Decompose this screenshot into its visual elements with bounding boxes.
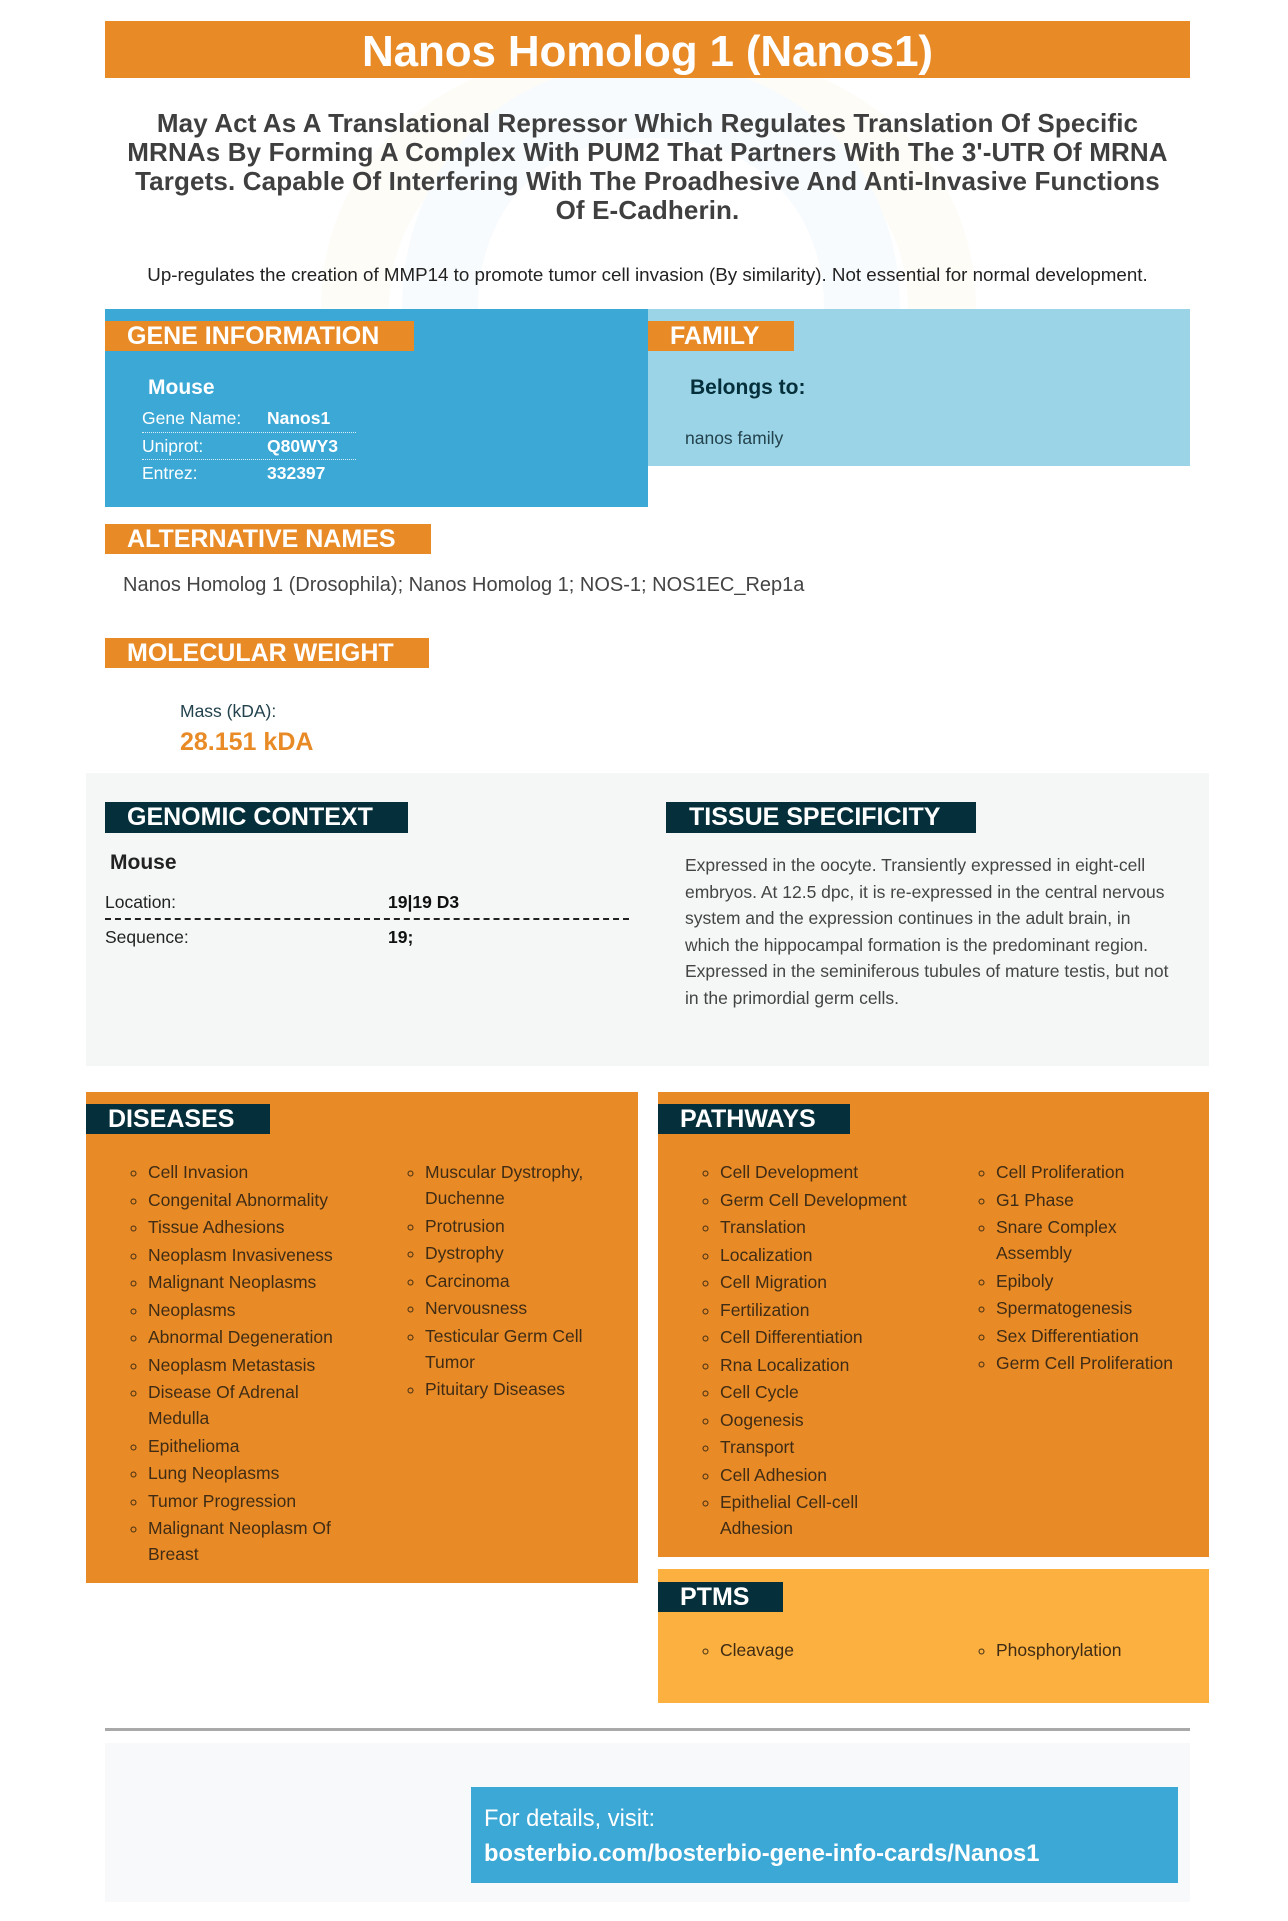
- pathways list column 1: Adhesion: [720, 1518, 793, 1538]
- diseases list column 1: Tumor Progression: [148, 1490, 296, 1510]
- footer panel: [105, 1743, 1190, 1902]
- subtitle: May Act As A Translational Repressor Which Regulates Translation Of Specific: [157, 108, 1138, 138]
- panel: gene information: [105, 309, 648, 507]
- pathways list column 1: Transport: [720, 1437, 794, 1457]
- heading: pathways: [658, 1104, 850, 1134]
- diseases list column 2: Duchenne: [425, 1188, 505, 1208]
- diseases list column 1: Lung Neoplasms: [148, 1463, 279, 1483]
- pathways list column 2: Germ Cell Proliferation: [996, 1353, 1173, 1373]
- gene details table: Gene Name:: [142, 408, 241, 428]
- heading: molecular weight: MOLECULAR WEIGHT: [127, 639, 394, 667]
- description: Up-regulates the creation of MMP14 to promote tumor cell invasion (By similarity). Not essential for normal development.: [147, 264, 1148, 285]
- diseases list column 2: Testicular Germ Cell: [425, 1326, 583, 1346]
- diseases list column 2: Nervousness: [425, 1298, 527, 1318]
- call to action: [471, 1787, 1178, 1883]
- diseases list column 2: Pituitary Diseases: [425, 1379, 565, 1399]
- molecular weight value: 28.151 kDA: [180, 728, 313, 756]
- details link: bosterbio.com/bosterbio-gene-info-cards/Nanos1: [484, 1841, 1039, 1867]
- pathways list column 1: Cell Differentiation: [720, 1327, 863, 1347]
- tissue specificity text: system and the expression continues in the adult brain, in: [685, 908, 1131, 928]
- diseases list column 1: Breast: [148, 1544, 199, 1564]
- belongs to label: Belongs to:: [690, 376, 806, 399]
- pathways list column 1: Cell Adhesion: [720, 1464, 827, 1484]
- watermark logo: [0, 0, 1288, 320]
- diseases list column 1: Abnormal Degeneration: [148, 1327, 333, 1347]
- species: Mouse: [110, 851, 177, 874]
- subtitle: Of E-Cadherin.: [556, 195, 739, 225]
- diseases list column 1: Neoplasm Metastasis: [148, 1354, 315, 1374]
- pathways list column 2: G1 Phase: [996, 1190, 1074, 1210]
- pathways list column 2: Sex Differentiation: [996, 1326, 1139, 1346]
- diseases list column 2: Dystrophy: [425, 1243, 504, 1263]
- pathways list column 1: Translation: [720, 1217, 806, 1237]
- gene details table: Uniprot:: [142, 436, 203, 456]
- diseases list column 1: [130, 1162, 333, 1564]
- details label: For details, visit:: [484, 1806, 655, 1832]
- diseases list column 1: Malignant Neoplasms: [148, 1272, 316, 1292]
- pathways list column 2: Cell Proliferation: [996, 1162, 1124, 1182]
- heading: genomic context: GENOMIC CONTEXT: [127, 803, 373, 831]
- title: [105, 21, 1190, 78]
- diseases list column 2: Protrusion: [425, 1216, 505, 1236]
- diseases list column 1: Neoplasms: [148, 1300, 236, 1320]
- diseases list column 1: Neoplasm Invasiveness: [148, 1244, 333, 1264]
- heading: family: [648, 321, 794, 351]
- tissue specificity text: Expressed in the seminiferous tubules of mature testis, but not: [685, 961, 1168, 981]
- diseases list column 2: Muscular Dystrophy,: [425, 1162, 583, 1182]
- pathways list column 1: Germ Cell Development: [720, 1190, 907, 1210]
- diseases list column 2: [408, 1162, 583, 1399]
- subtitle: [127, 108, 1168, 225]
- genomic table: 19;: [388, 927, 413, 947]
- pathways list column 1: Cell Migration: [720, 1272, 827, 1292]
- pathways list column 1: Fertilization: [720, 1300, 809, 1320]
- panel: family: [648, 309, 1190, 466]
- diseases list column 1: Medulla: [148, 1408, 209, 1428]
- alternative names text: Nanos Homolog 1 (Drosophila); Nanos Homolog 1; NOS-1; NOS1EC_Rep1a: [123, 574, 804, 596]
- diseases list column 1: Congenital Abnormality: [148, 1190, 328, 1210]
- diseases list column 2: Tumor: [425, 1352, 475, 1372]
- diseases list column 1: Cell Invasion: [148, 1162, 248, 1182]
- heading: gene information: GENE INFORMATION: [127, 322, 379, 350]
- tissue specificity text: [685, 855, 1168, 1008]
- subtitle: Targets. Capable Of Interfering With The Proadhesive And Anti-Invasive Functions: [135, 166, 1160, 196]
- title: Nanos Homolog 1 (Nanos1): [362, 27, 933, 76]
- pathways list column 2: Assembly: [996, 1243, 1072, 1263]
- heading: ptms: [658, 1582, 783, 1612]
- species: Mouse: [148, 376, 215, 399]
- panel: genomic context and tissue specificity: [86, 773, 1209, 1066]
- gene details table: Q80WY3: [267, 436, 338, 456]
- tissue specificity text: Expressed in the oocyte. Transiently expressed in eight-cell: [685, 855, 1145, 875]
- ptms list column 1: Cleavage: [720, 1640, 794, 1660]
- pathways list column 1: Localization: [720, 1244, 812, 1264]
- pathways list column 1: Cell Cycle: [720, 1382, 799, 1402]
- diseases list column 1: Epithelioma: [148, 1436, 239, 1456]
- genomic table: [105, 892, 629, 947]
- pathways list column 1: Oogenesis: [720, 1410, 804, 1430]
- molecular weight value: Mass (kDA):: [180, 701, 276, 721]
- gene details table: [142, 408, 356, 483]
- ptms list column 2: Phosphorylation: [996, 1640, 1122, 1660]
- pathways list column 2: Epiboly: [996, 1270, 1053, 1290]
- family value: nanos family: [685, 428, 783, 448]
- genomic table: Sequence:: [105, 927, 189, 947]
- pathways list column 2: [978, 1162, 1173, 1373]
- panel: ptms: [658, 1569, 1209, 1703]
- tissue specificity text: embryos. At 12.5 dpc, it is re-expressed in the central nervous: [685, 882, 1165, 902]
- gene details table: Entrez:: [142, 463, 197, 483]
- heading: tissue specificity: TISSUE SPECIFICITY: [689, 803, 940, 831]
- heading: ptms: PTMS: [680, 1583, 749, 1611]
- heading: alternative names: ALTERNATIVE NAMES: [127, 525, 396, 553]
- pathways list column 1: [702, 1162, 907, 1538]
- pathways list column 2: Snare Complex: [996, 1217, 1117, 1237]
- subtitle: MRNAs By Forming A Complex With PUM2 That Partners With The 3'-UTR Of MRNA: [127, 137, 1168, 167]
- molecular weight value: [180, 701, 313, 756]
- pathways list column 1: Epithelial Cell-cell: [720, 1492, 858, 1512]
- heading: diseases: [86, 1104, 270, 1134]
- diseases list column 1: Tissue Adhesions: [148, 1217, 285, 1237]
- heading: pathways: PATHWAYS: [680, 1105, 816, 1133]
- pathways list column 1: Cell Development: [720, 1162, 858, 1182]
- heading: family: FAMILY: [670, 322, 759, 350]
- diseases list column 2: Carcinoma: [425, 1270, 510, 1290]
- diseases list column 1: Malignant Neoplasm Of: [148, 1518, 331, 1538]
- panel: pathways: [658, 1092, 1209, 1557]
- diseases list column 1: Disease Of Adrenal: [148, 1382, 299, 1402]
- pathways list column 1: Rna Localization: [720, 1354, 849, 1374]
- genomic table: Location:: [105, 892, 176, 912]
- gene details table: 332397: [267, 463, 325, 483]
- gene details table: Nanos1: [267, 408, 330, 428]
- pathways list column 2: Spermatogenesis: [996, 1298, 1132, 1318]
- tissue specificity text: which the hippocampal formation is the predominant region.: [685, 934, 1148, 954]
- genomic table: 19|19 D3: [388, 892, 459, 912]
- heading: diseases: DISEASES: [108, 1105, 234, 1133]
- tissue specificity text: in the primordial germ cells.: [685, 988, 899, 1008]
- panel: diseases: [86, 1092, 638, 1583]
